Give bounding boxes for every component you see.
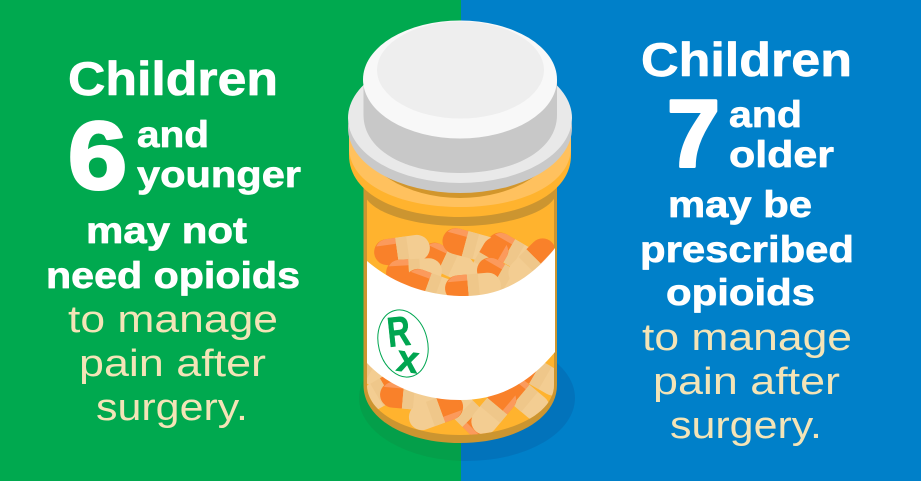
label xyxy=(367,248,555,400)
icon: Rx symbol: R xyxy=(385,307,413,356)
and younger: and xyxy=(137,114,209,155)
panel: blue background xyxy=(461,0,921,481)
to manage pain after surgery: to manage xyxy=(642,317,852,359)
left text block xyxy=(46,52,301,429)
to manage pain after surgery: surgery. xyxy=(670,405,822,447)
may not need opioids xyxy=(46,210,300,296)
may be prescribed opioids: prescribed xyxy=(640,229,854,270)
pill bottle illustration xyxy=(335,20,575,461)
to manage pain after surgery: pain after xyxy=(653,361,840,403)
to manage pain after surgery: pain after xyxy=(79,343,266,385)
right text block xyxy=(640,33,854,447)
and older xyxy=(729,94,834,175)
and older: and xyxy=(729,94,802,135)
and younger: younger xyxy=(137,154,301,195)
bottle shadow xyxy=(359,364,575,461)
icon: Rx symbol: x xyxy=(394,338,422,382)
to manage pain after surgery xyxy=(68,299,278,429)
may be prescribed opioids: may be xyxy=(668,184,812,225)
to manage pain after surgery xyxy=(642,317,852,447)
to manage pain after surgery: to manage xyxy=(68,299,278,341)
and older: older xyxy=(729,134,834,175)
heading: Children: Children xyxy=(641,33,852,86)
heading: Children: Children xyxy=(68,52,278,105)
number 7: 7 xyxy=(667,80,720,188)
to manage pain after surgery: surgery. xyxy=(96,387,248,429)
capsules xyxy=(367,228,554,435)
bottle body xyxy=(364,170,557,443)
bottle neck xyxy=(349,68,571,226)
may not need opioids: need opioids xyxy=(46,255,300,296)
number 6: 6 xyxy=(68,102,127,210)
may not need opioids: may not xyxy=(86,210,247,251)
bottle lid xyxy=(348,20,572,193)
panel: green background xyxy=(0,0,461,481)
may be prescribed opioids xyxy=(640,184,854,313)
and younger xyxy=(137,114,301,195)
may be prescribed opioids: opioids xyxy=(666,272,815,313)
icon: Rx symbol xyxy=(371,305,435,382)
